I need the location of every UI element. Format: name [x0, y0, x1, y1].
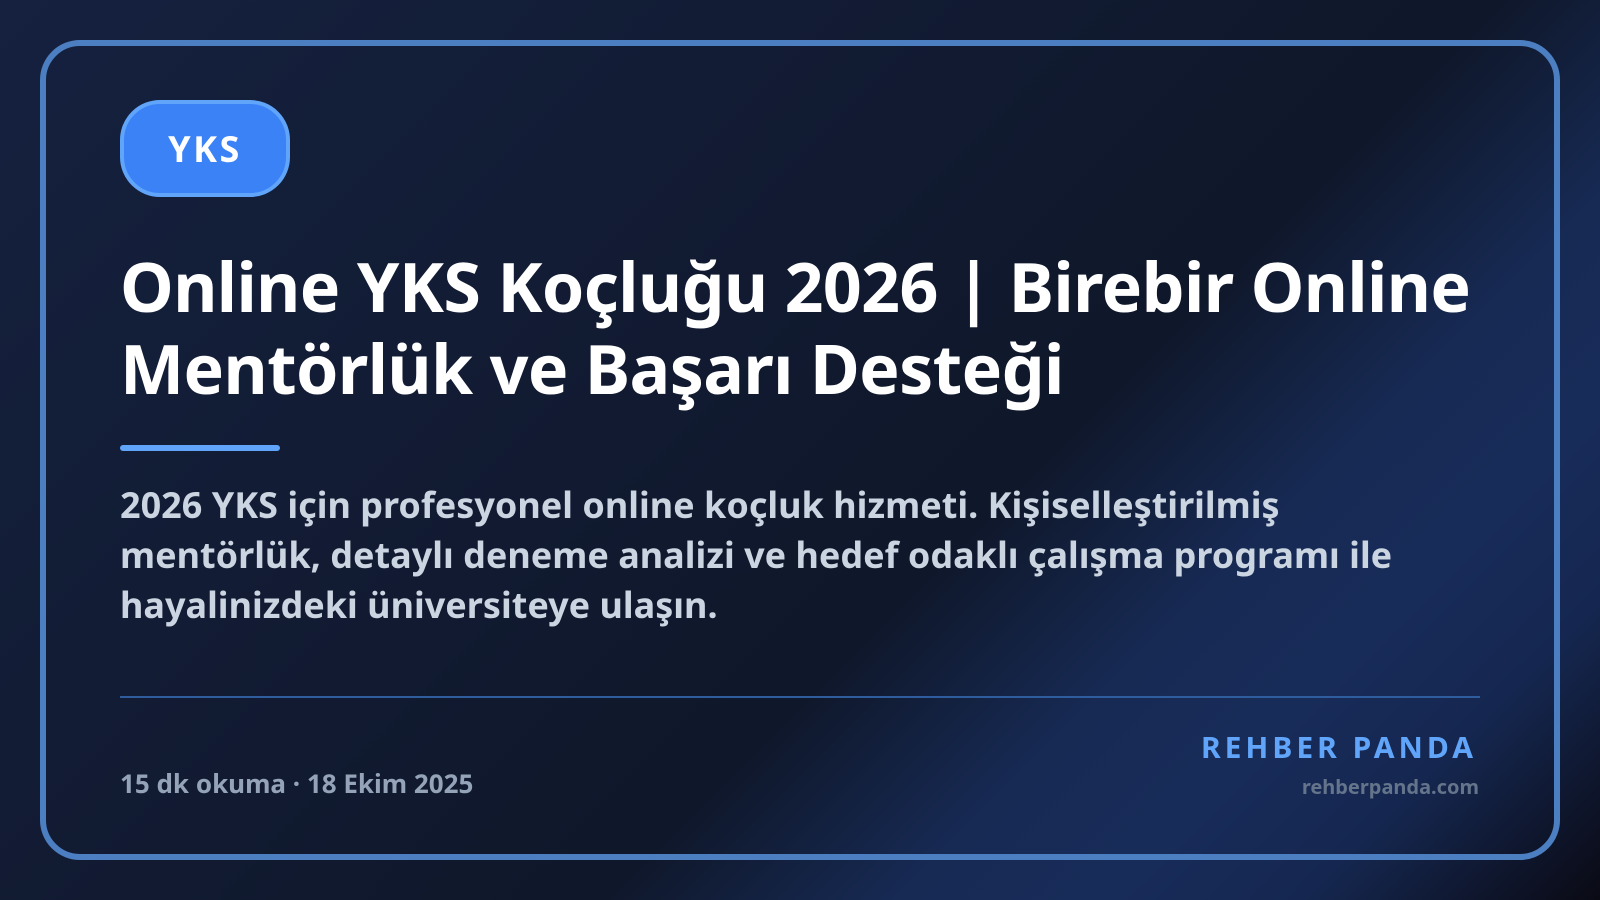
- badge: YKS: YKS: [168, 124, 242, 173]
- brand name: REHBER PANDA: [1201, 726, 1477, 767]
- title: Online YKS Koçluğu 2026 | Birebir Online: [120, 239, 1470, 332]
- website: rehberpanda.com: [1302, 773, 1479, 800]
- accent bar: [120, 445, 280, 451]
- badge: YKS: [120, 100, 290, 197]
- description text: mentörlük, detaylı deneme analizi ve hedef odaklı çalışma programı ile: [120, 530, 1392, 579]
- title: [120, 239, 1470, 414]
- description text: [120, 480, 1392, 629]
- description text: hayalinizdeki üniversiteye ulaşın.: [120, 580, 718, 629]
- reading time and date: 15 dk okuma · 18 Ekim 2025: [120, 765, 473, 801]
- footer divider: [120, 696, 1480, 698]
- description text: 2026 YKS için profesyonel online koçluk hizmeti. Kişiselleştirilmiş: [120, 480, 1280, 529]
- title: Mentörlük ve Başarı Desteği: [120, 321, 1064, 414]
